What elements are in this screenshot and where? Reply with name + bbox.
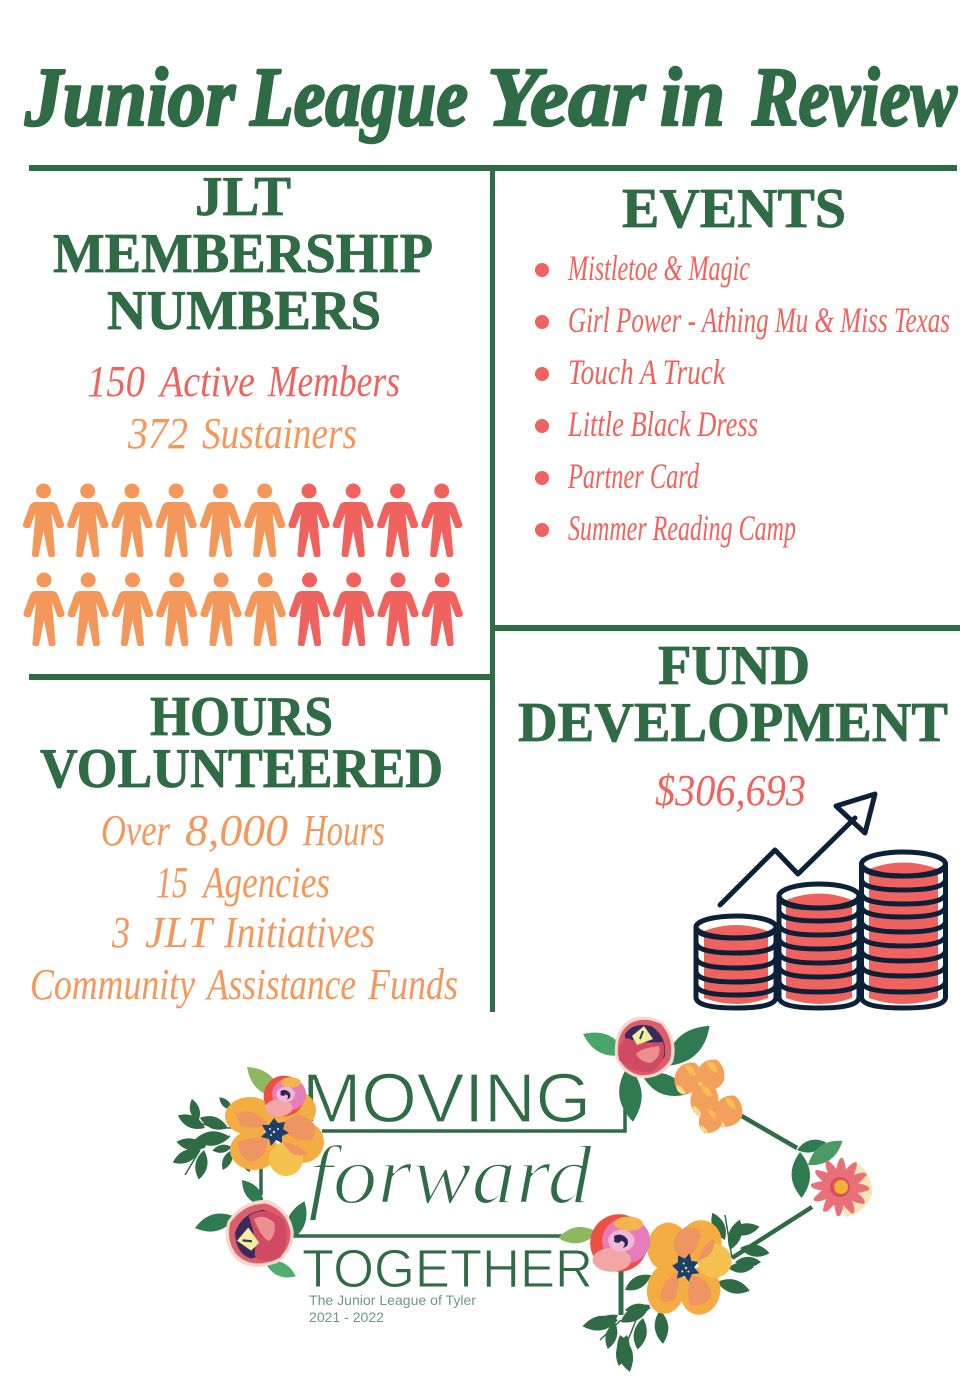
heading: JLT membership numbers: [53, 166, 433, 342]
text: volunteer stats: 3: [111, 908, 130, 957]
title: League: [249, 51, 468, 144]
logo text: 2021 - 2022: [309, 1309, 384, 1325]
list: events: Touch A Truck: [568, 352, 726, 392]
title: [24, 51, 958, 144]
heading: events: EVENTS: [622, 178, 846, 240]
text: member counts: Active: [157, 357, 255, 406]
list: events: Mistletoe & Magic: [567, 248, 750, 288]
text: volunteer stats: Community: [30, 960, 195, 1009]
text: volunteer stats: Initiatives: [223, 908, 375, 957]
icon: short coin stack: [696, 916, 776, 1008]
heading: JLT membership numbers: MEMBERSHIP: [53, 223, 433, 285]
text: volunteer stats: Assistance: [205, 960, 356, 1009]
heading: fund development: DEVELOPMENT: [518, 692, 948, 754]
text: volunteer stats: JLT: [145, 908, 215, 957]
panel: fund development: [518, 635, 948, 1008]
logo text: forward: [308, 1129, 593, 1222]
text: member counts: 372: [127, 409, 188, 458]
title: Year: [487, 51, 646, 144]
icon: growth arrow: [720, 794, 875, 905]
floral cluster: daisy: [791, 1134, 872, 1217]
text: volunteer stats: Agencies: [201, 858, 330, 907]
floral cluster: bottom right: [557, 1210, 771, 1374]
text: member counts: Sustainers: [202, 409, 357, 458]
heading: hours volunteered: VOLUNTEERED: [40, 738, 443, 800]
icon: rising coin stacks with arrow: [696, 794, 946, 1008]
text: volunteer stats: 15: [156, 858, 188, 907]
icon: medium coin stack: [779, 884, 859, 1008]
text: volunteer stats: Over: [101, 806, 171, 855]
figure: amount raised: $306,693: [655, 766, 806, 815]
heading: hours volunteered: HOURS: [150, 686, 333, 748]
list: events: [535, 248, 950, 548]
list: events: Little Black Dress: [567, 404, 758, 444]
panel: hours volunteered: [30, 686, 458, 1009]
list: events: Partner Card: [567, 456, 700, 496]
logo text: TOGETHER: [302, 1239, 593, 1299]
text: member counts: [87, 357, 400, 458]
logo: Moving Forward Together: [170, 1016, 872, 1374]
floral cluster: lower left: [193, 1176, 313, 1283]
heading: JLT membership numbers: JLT: [195, 166, 291, 228]
title: in: [660, 51, 725, 144]
pictogram: people rows: [23, 484, 463, 646]
text: volunteer stats: Funds: [367, 960, 458, 1009]
panel: membership numbers: [23, 166, 463, 646]
logo frame lines: [261, 1095, 812, 1315]
floral cluster: top right: [579, 1016, 742, 1134]
text: volunteer stats: 8,000: [185, 806, 288, 855]
text: member counts: Members: [267, 357, 400, 406]
title: Junior: [24, 51, 236, 144]
logo text: MOVING: [302, 1059, 591, 1137]
logo text: [302, 1059, 593, 1325]
logo text: The Junior League of Tyler: [309, 1292, 476, 1308]
heading: fund development: [518, 635, 948, 754]
text: member counts: 150: [87, 357, 145, 406]
list: events: Summer Reading Camp: [568, 508, 796, 548]
heading: hours volunteered: [40, 686, 443, 800]
heading: JLT membership numbers: NUMBERS: [107, 280, 381, 342]
heading: fund development: FUND: [658, 635, 810, 697]
panel dividers: [29, 165, 960, 1012]
icon: tall coin stack: [862, 852, 946, 1008]
text: volunteer stats: Hours: [302, 806, 385, 855]
text: volunteer stats: [30, 806, 458, 1009]
floral cluster: upper left: [170, 1060, 324, 1181]
panel: events: [535, 178, 950, 548]
